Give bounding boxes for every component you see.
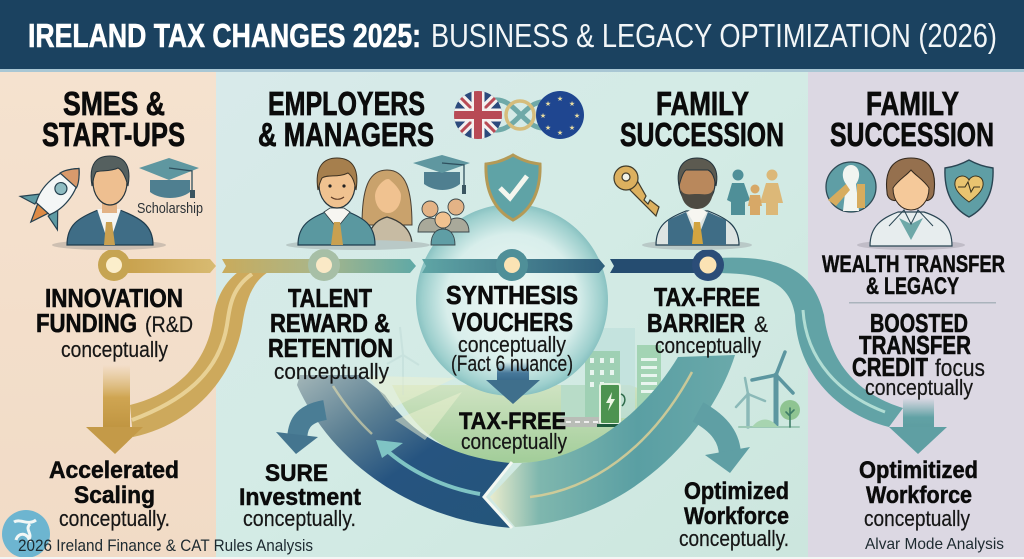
wealth transfer text: & LEGACY <box>866 273 959 300</box>
buildings <box>560 328 661 427</box>
arrow: gold sweep to accelerated scaling <box>86 272 268 454</box>
outcome: accelerated scaling: Accelerated <box>49 457 179 484</box>
heading: START-UPS <box>42 116 185 153</box>
outcome: optimitized workforce: Optimitized <box>859 457 978 484</box>
boosted transfer credit text: BOOSTED <box>870 308 968 338</box>
heading: SMES & <box>63 85 165 122</box>
arrow: sphere down arrow <box>486 362 540 404</box>
synthesis text: VOUCHERS <box>452 307 573 337</box>
outcome: optimitized workforce: Workforce <box>866 482 972 509</box>
icon label: Scholarship <box>137 200 203 217</box>
panel: legacy background <box>808 70 1024 557</box>
title: IRELAND TAX CHANGES 2025: <box>28 17 421 54</box>
column: employers and managers <box>239 85 540 531</box>
heading <box>830 85 994 153</box>
synthesis text: (Fact 6 nuance) <box>451 351 573 376</box>
icon: family <box>727 170 783 215</box>
icon: EU flag: ★ <box>557 129 563 137</box>
synthesis text <box>446 280 578 376</box>
icon: shield with check <box>486 155 540 220</box>
timeline node 3 <box>496 249 528 281</box>
wealth transfer text <box>822 251 1005 300</box>
timeline bars <box>98 249 724 281</box>
icon: man <box>286 158 430 250</box>
timeline node 4 <box>692 249 724 281</box>
talent reward text: REWARD & <box>270 308 390 338</box>
outcome: accelerated scaling <box>49 457 179 531</box>
icon: key <box>614 166 659 216</box>
heading: SUCCESSION <box>620 116 784 153</box>
icon: keyhole medallion <box>826 162 876 212</box>
boosted transfer credit text: CREDIT <box>852 352 928 382</box>
synthesis text: SYNTHESIS <box>446 280 578 310</box>
arrow: teal sweep to optimitized workforce <box>716 258 947 454</box>
arrow: right teal swoosh <box>484 355 735 528</box>
outcome: optimitized workforce <box>859 457 978 531</box>
icon: EU flag: ★ <box>569 100 575 108</box>
heading <box>258 85 434 153</box>
icon: team group <box>418 199 469 245</box>
boosted transfer credit text <box>852 308 985 400</box>
tax-free text: TAX-FREE <box>459 408 566 435</box>
tax-free text: conceptually <box>461 429 567 454</box>
icon: faint wind turbine <box>387 327 419 395</box>
outcome: optimized workforce: Optimized <box>684 478 789 505</box>
central sphere <box>416 204 608 396</box>
icon: woman in white coat <box>857 158 965 250</box>
heading <box>42 85 185 153</box>
talent reward text: RETENTION <box>268 333 393 363</box>
column: SMEs and start-ups <box>12 85 203 531</box>
icon: logo circle <box>2 510 50 558</box>
column: family succession legacy <box>822 85 1005 531</box>
heading: & MANAGERS <box>258 116 434 153</box>
icon: bearded man in vest <box>642 158 752 250</box>
tax-free barrier text: & <box>754 312 768 337</box>
timeline node 2 <box>308 249 340 281</box>
icon: EU flag: ★ <box>540 112 546 120</box>
panel: employers and family succession background <box>216 70 808 557</box>
icon: UK flag <box>454 91 502 139</box>
heading <box>620 85 784 153</box>
icon: person with suit <box>52 156 166 250</box>
heading: FAMILY <box>866 85 959 122</box>
talent reward text: conceptually <box>274 359 389 384</box>
heading: EMPLOYERS <box>268 85 425 122</box>
outcome: optimized workforce: Workforce <box>684 503 789 530</box>
footer source right: Alvar Mode Analysis <box>865 536 1004 553</box>
outcome: optimized workforce: conceptually. <box>679 526 789 551</box>
innovation funding text: conceptually <box>61 337 168 362</box>
icon: shield with heart <box>945 160 993 217</box>
talent reward text <box>268 283 393 384</box>
outcome: SURE investment: Investment <box>239 484 361 511</box>
icon: EU flag <box>536 91 584 139</box>
footer source left: 2026 Ireland Finance & CAT Rules Analysis <box>18 536 313 555</box>
column: synthesis vouchers <box>446 280 578 454</box>
icon: rocket <box>12 152 98 239</box>
synthesis text: conceptually <box>458 332 566 357</box>
icon: EU flag: ★ <box>574 112 580 120</box>
innovation funding text: INNOVATION <box>45 283 183 313</box>
light rays over swoosh <box>368 376 462 440</box>
talent reward text: TALENT <box>288 283 372 313</box>
arrow: branch to SURE investment <box>276 410 325 454</box>
icon: celtic knot <box>495 100 545 130</box>
innovation funding text <box>36 283 193 362</box>
title <box>28 17 997 54</box>
icon: EU flag: ★ <box>545 100 551 108</box>
tax-free barrier text: TAX-FREE <box>654 282 760 312</box>
tax-free barrier text: conceptually <box>655 333 761 358</box>
icon: EU flag: ★ <box>569 124 575 132</box>
icon: EU flag: ★ <box>557 95 563 103</box>
boosted transfer credit text: TRANSFER <box>859 330 971 360</box>
outcome: SURE investment: SURE <box>265 460 328 487</box>
innovation funding text: (R&D <box>145 312 193 337</box>
header banner <box>0 0 1024 72</box>
outcome: accelerated scaling: conceptually. <box>59 506 170 531</box>
outcome: SURE investment <box>239 460 361 531</box>
icon: graduation cap <box>139 158 199 198</box>
boosted transfer credit text: focus <box>935 355 985 382</box>
panel: SMEs background <box>0 70 216 557</box>
icon: EV charger <box>597 384 625 427</box>
tax-free barrier text <box>647 282 768 358</box>
icon: wind turbines <box>736 352 800 427</box>
timeline node 1 <box>98 249 130 281</box>
icon: EU flag: ★ <box>545 124 551 132</box>
arrow: branch to optimized workforce <box>698 412 750 473</box>
icon: graduation cap <box>413 155 470 194</box>
arrow: left navy swoosh <box>297 375 512 528</box>
tax-free text <box>459 408 567 454</box>
outcome: optimitized workforce: conceptually <box>864 506 970 531</box>
icon: woman <box>362 170 412 245</box>
heading: FAMILY <box>656 85 749 122</box>
innovation funding text: FUNDING <box>36 308 137 338</box>
boosted transfer credit text: conceptually <box>865 375 973 400</box>
column: family succession centre <box>614 85 789 551</box>
outcome: accelerated scaling: Scaling <box>74 482 155 509</box>
arrow: inner return arrow <box>376 440 480 494</box>
tax-free barrier text: BARRIER <box>647 308 745 338</box>
outcome: optimized workforce <box>679 478 789 551</box>
central landscape <box>392 328 668 463</box>
outcome: SURE investment: conceptually. <box>243 506 356 531</box>
